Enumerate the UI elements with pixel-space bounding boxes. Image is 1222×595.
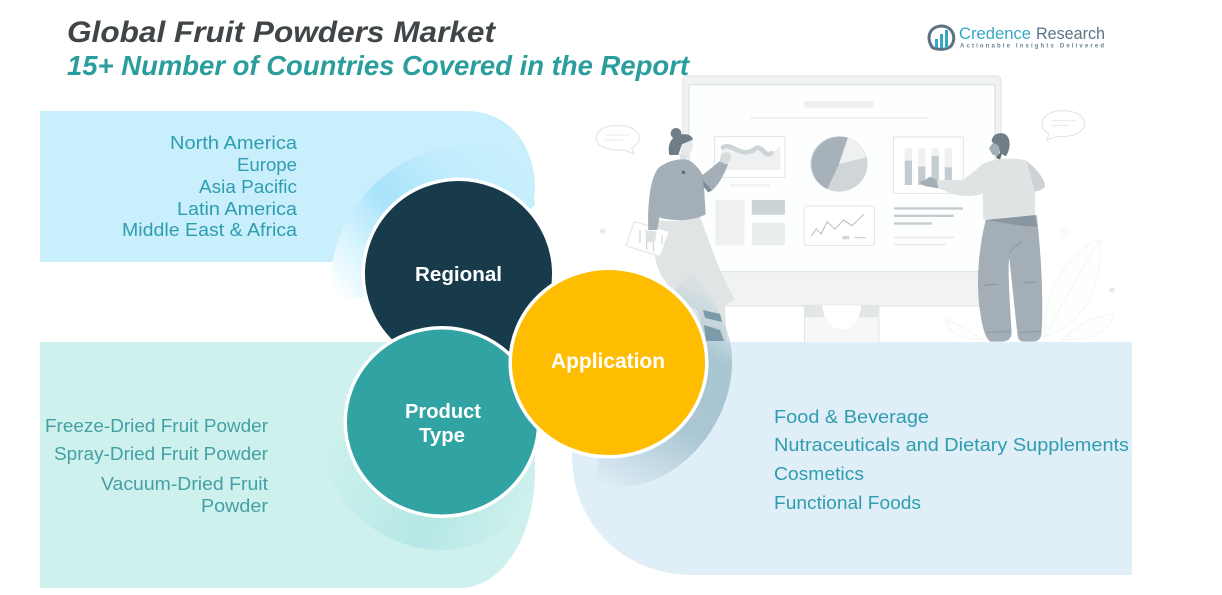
text block: product types: Spray-Dried Fruit Powder <box>54 443 268 464</box>
pie chart <box>810 136 868 192</box>
line chart <box>804 206 874 245</box>
label: product type: Product <box>405 401 481 423</box>
subtitle: 15+ Number of Countries Covered in the Report <box>67 50 691 81</box>
logo tagline: Actionable Insights Delivered <box>960 44 1104 50</box>
back arm <box>1025 160 1045 192</box>
logo icon <box>929 26 954 49</box>
sweater <box>648 159 728 230</box>
face <box>989 141 1000 156</box>
paper <box>626 222 669 257</box>
trousers <box>978 215 1042 342</box>
text block: product types: Powder <box>201 495 268 516</box>
text block: regions <box>122 132 298 240</box>
circle: application <box>510 268 707 457</box>
hair <box>669 134 693 155</box>
text block: product types: Vacuum-Dried Fruit <box>101 473 268 494</box>
monitor <box>683 76 1001 344</box>
panel: regional background <box>40 111 535 262</box>
figure: woman presenter <box>626 128 735 342</box>
logo: Credence Research: Research <box>1036 24 1105 43</box>
arc: product type crescent <box>320 422 535 550</box>
text block: applications: Functional Foods <box>774 492 921 513</box>
shirt <box>937 159 1035 220</box>
text block: applications: Nutraceuticals and Dietary Supplements <box>774 434 1129 455</box>
label: product type: Type <box>419 425 465 447</box>
leaves <box>946 229 1114 340</box>
speech bubble left <box>596 126 639 154</box>
layout blocks <box>715 200 785 245</box>
text block: product types: Freeze-Dried Fruit Powder <box>45 415 268 436</box>
area chart <box>715 137 785 186</box>
monitor heading bars <box>750 101 929 119</box>
woman's foot over arc <box>703 310 724 341</box>
text block: regions: Latin America <box>177 198 298 219</box>
text block: product types <box>45 415 268 516</box>
label: application: Application <box>551 350 665 373</box>
hand <box>918 177 938 188</box>
text block: applications <box>774 406 1129 513</box>
face <box>681 140 693 155</box>
text block: regions: Middle East & Africa <box>122 219 298 240</box>
logo wordmark: Credence <box>959 24 1031 43</box>
decorative dots <box>600 228 1115 293</box>
arc: application crescent <box>596 272 732 487</box>
arc: regional crescent <box>330 145 535 305</box>
hand <box>720 152 731 164</box>
neck <box>679 153 688 162</box>
hair <box>992 133 1010 156</box>
skirt <box>655 217 735 342</box>
text lines <box>894 207 963 246</box>
neck <box>996 153 1002 159</box>
circle: product type <box>345 328 539 516</box>
bar chart <box>893 137 963 193</box>
title: Global Fruit Powders Market <box>67 16 496 49</box>
text block: regions: North America <box>170 132 298 153</box>
circle: regional <box>363 179 554 369</box>
panel: application background <box>572 342 1132 575</box>
label: regional: Regional <box>415 264 502 286</box>
text block: applications: Cosmetics <box>774 463 864 484</box>
text block: applications: Food & Beverage <box>774 406 929 427</box>
illustration: monitor and dashboards <box>596 76 1115 344</box>
speech bubble right <box>1042 111 1085 140</box>
text block: regions: Asia Pacific <box>199 176 297 197</box>
figure: man presenter <box>918 133 1045 342</box>
logo: Credence Research <box>929 24 1105 50</box>
panel: product type background <box>40 342 535 588</box>
text block: regions: Europe <box>237 154 297 175</box>
